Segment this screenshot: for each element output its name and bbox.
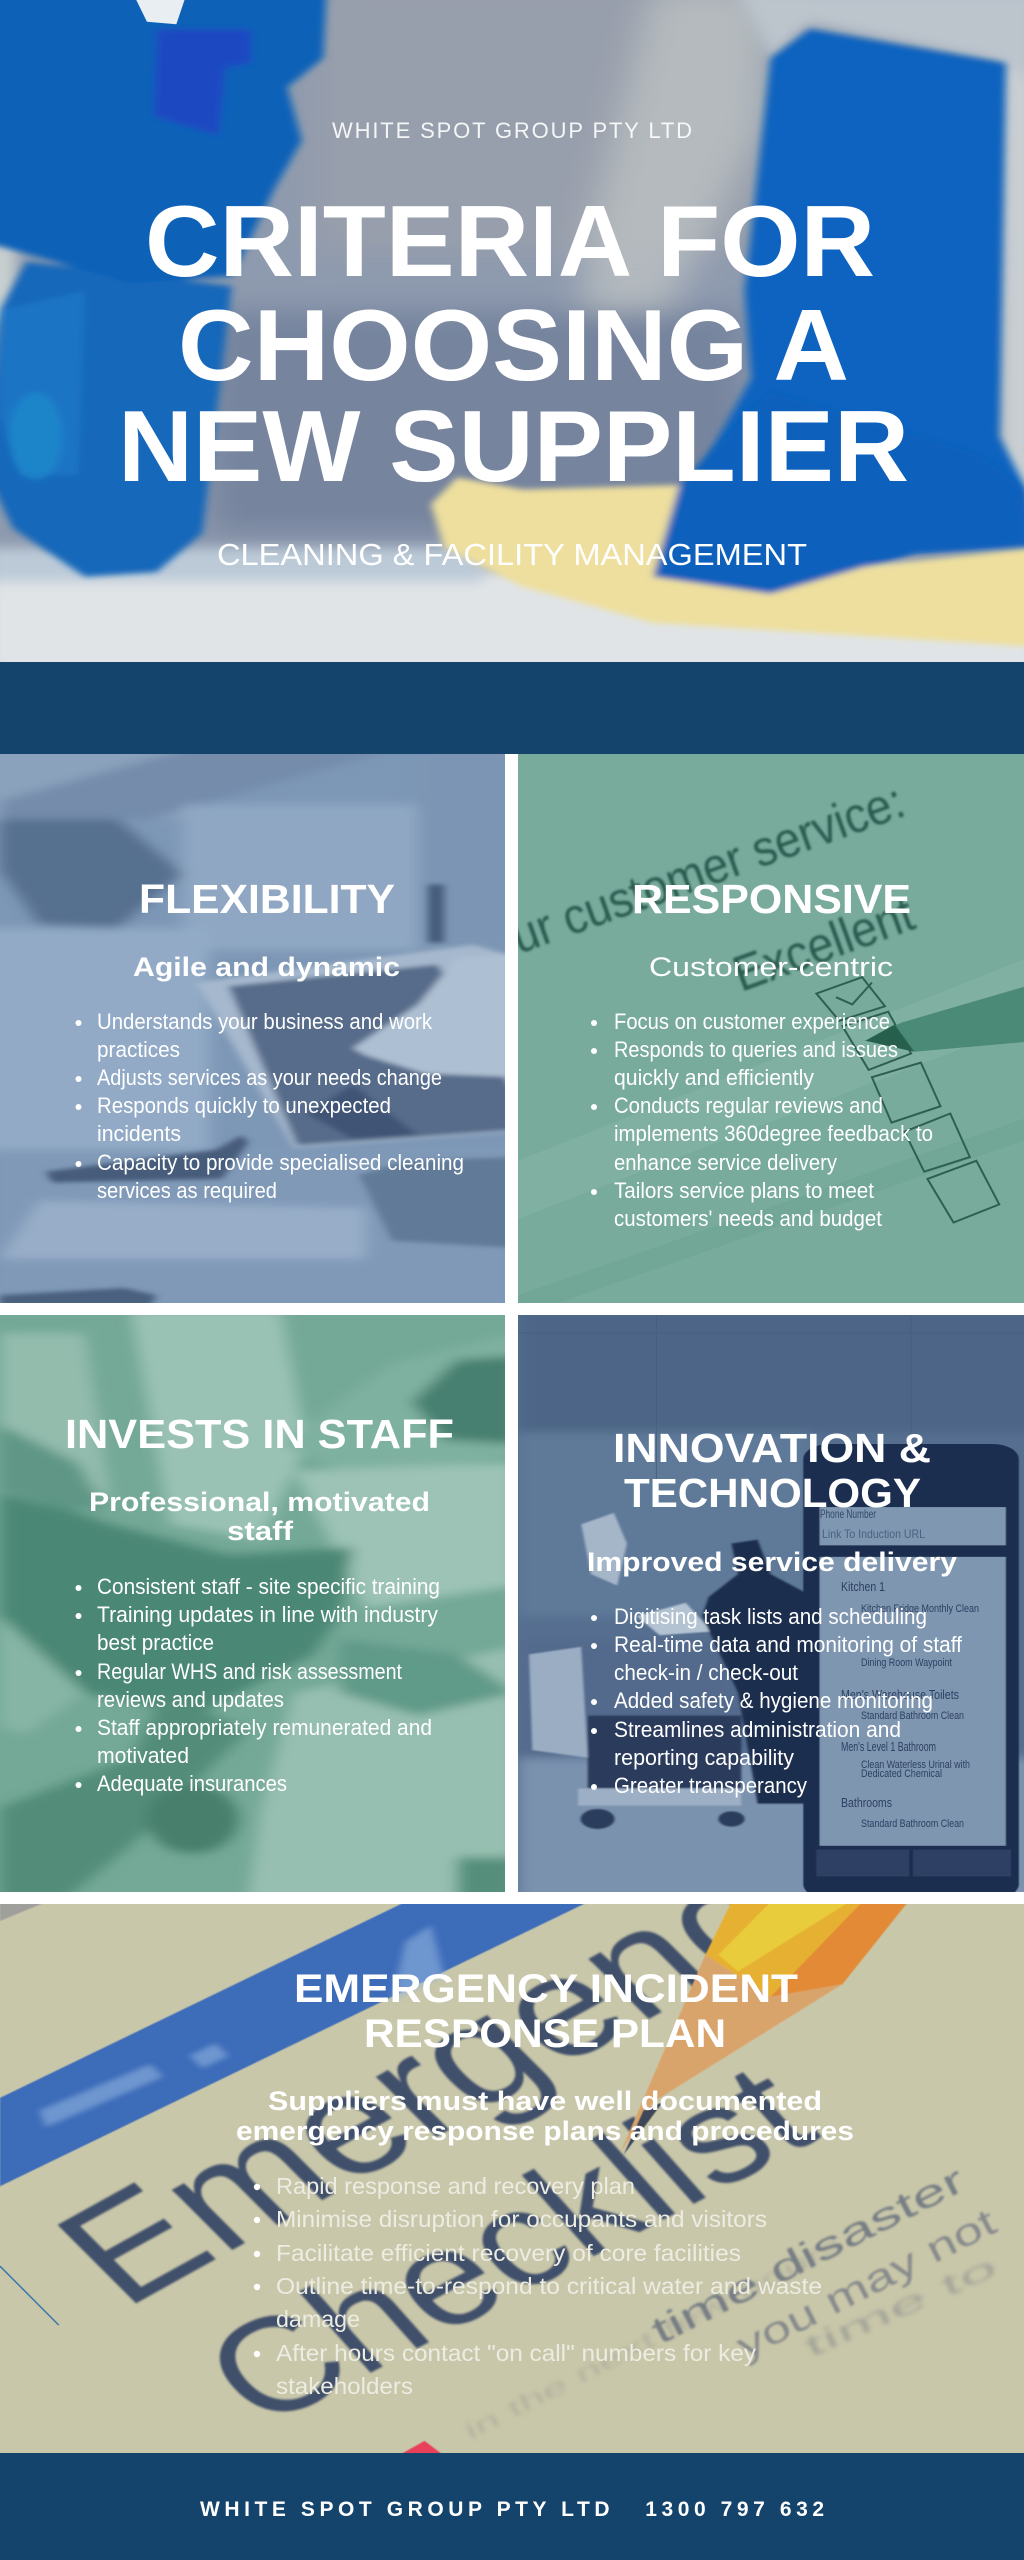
subtitle: CLEANING & FACILITY MANAGEMENT bbox=[217, 537, 807, 572]
bullet list: Understands your business and work bbox=[97, 1009, 433, 1034]
subheading: staff bbox=[227, 1516, 294, 1546]
footer bar bbox=[0, 2453, 1024, 2560]
bullet list: Rapid response and recovery plan bbox=[276, 2173, 635, 2199]
photo: cleaner and phone app: Standard Bathroom Clean bbox=[861, 1818, 964, 1830]
photo: cleaner and phone app: Kitchen Fridge Monthly Clean bbox=[861, 1603, 979, 1615]
heading: RESPONSE PLAN bbox=[364, 2012, 726, 2056]
bullet list bbox=[254, 2173, 822, 2399]
photo: cleaner and phone app: Kitchen 1 bbox=[841, 1579, 885, 1594]
panel: innovation and technology bbox=[518, 1315, 1024, 1892]
bullet list bbox=[76, 1574, 440, 1796]
photo: customer service checklist bbox=[518, 772, 1024, 1224]
bullet list: Greater transperancy bbox=[614, 1773, 807, 1798]
bullet list: Minimise disruption for occupants and visitors bbox=[276, 2206, 767, 2232]
bullet list: Outline time-to-respond to critical water and waste bbox=[276, 2273, 822, 2299]
panel: hero banner bbox=[0, 0, 1024, 662]
bullet list: Adjusts services as your needs change bbox=[97, 1065, 442, 1090]
bullet list: best practice bbox=[97, 1630, 214, 1655]
heading: FLEXIBILITY bbox=[139, 876, 395, 922]
photo: handshake and tablet bbox=[0, 754, 505, 1303]
bullet list: reporting capability bbox=[614, 1745, 794, 1770]
bullet list: reviews and updates bbox=[97, 1687, 284, 1712]
photo: emergency checklist document: time disaster bbox=[645, 2159, 972, 2353]
photo: cleaner and phone app: Dining Room Waypoint bbox=[861, 1657, 952, 1669]
heading: INVESTS IN STAFF bbox=[65, 1411, 454, 1457]
company name: WHITE SPOT GROUP PTY LTD bbox=[332, 118, 692, 143]
bullet list bbox=[591, 1009, 933, 1231]
bullet list: Focus on customer experience bbox=[614, 1009, 890, 1034]
panel text bbox=[587, 1425, 963, 1798]
bullet list: Added safety & hygiene monitoring bbox=[614, 1688, 933, 1713]
photo: cleaner and phone app: Clean Waterless Urinal with bbox=[861, 1759, 970, 1771]
main title: CRITERIA FOR bbox=[145, 186, 875, 298]
bullet list: incidents bbox=[97, 1121, 181, 1146]
bullet list: Capacity to provide specialised cleaning bbox=[97, 1150, 464, 1175]
subheading: Suppliers must have well documented bbox=[268, 2086, 822, 2116]
bullet list: motivated bbox=[97, 1743, 189, 1768]
subheading: Professional, motivated bbox=[89, 1487, 430, 1517]
panel: emergency incident response plan bbox=[0, 1904, 1024, 2453]
heading: RESPONSIVE bbox=[632, 876, 911, 922]
bullet list: implements 360degree feedback to bbox=[614, 1121, 933, 1146]
bullet list: Staff appropriately remunerated and bbox=[97, 1715, 432, 1740]
bullet list: stakeholders bbox=[276, 2373, 413, 2399]
photo: cleaner and phone app: Standard Bathroom Clean bbox=[861, 1710, 964, 1722]
bullet list: Real-time data and monitoring of staff bbox=[614, 1632, 963, 1657]
main title bbox=[118, 186, 909, 503]
bullet list: Streamlines administration and bbox=[614, 1717, 901, 1742]
heading bbox=[613, 1425, 931, 1516]
bullet list: Tailors service plans to meet bbox=[614, 1178, 874, 1203]
photo: cleaner and phone app: Men's Warehouse Toilets bbox=[841, 1687, 959, 1702]
navy band bbox=[0, 662, 1024, 754]
bullet list: Facilitate efficient recovery of core facilities bbox=[276, 2240, 741, 2266]
bullet list: Responds quickly to unexpected bbox=[97, 1093, 391, 1118]
hero text bbox=[118, 118, 909, 572]
heading: EMERGENCY INCIDENT bbox=[294, 1967, 798, 2011]
photo: cleaner and phone app: Dedicated Chemical bbox=[861, 1768, 942, 1780]
photo: cleaner and phone app: Phone Number bbox=[820, 1507, 876, 1521]
photo: emergency checklist document: in the next few hours bbox=[460, 2231, 847, 2445]
bullet list: check-in / check-out bbox=[614, 1660, 798, 1685]
bullet list: After hours contact "on call" numbers for key bbox=[276, 2340, 757, 2366]
photo: emergency checklist document: time to bbox=[799, 2250, 1002, 2364]
bullet list bbox=[76, 1009, 464, 1203]
subheading bbox=[89, 1487, 430, 1546]
main title: CHOOSING A bbox=[178, 290, 849, 402]
hero photo: gloved hands cleaning bbox=[0, 0, 1024, 662]
photo: emergency checklist document bbox=[0, 1904, 1004, 2453]
panel text bbox=[591, 876, 933, 1231]
bullet list: Training updates in line with industry bbox=[97, 1602, 438, 1627]
panel: responsive bbox=[518, 754, 1024, 1303]
bullet list: enhance service delivery bbox=[614, 1150, 837, 1175]
panel: flexibility bbox=[0, 754, 505, 1303]
photo: cleaner and phone app: Bathrooms bbox=[841, 1795, 892, 1810]
bullet list bbox=[591, 1604, 963, 1798]
heading: INNOVATION & bbox=[613, 1425, 931, 1471]
bullet list: Adequate insurances bbox=[97, 1771, 287, 1796]
footer contact text: WHITE SPOT GROUP PTY LTD 1300 797 632 bbox=[200, 2498, 824, 2521]
panel text bbox=[65, 1411, 454, 1796]
bullet list: practices bbox=[97, 1037, 180, 1062]
subheading: Customer-centric bbox=[649, 952, 893, 982]
subheading: Agile and dynamic bbox=[133, 952, 400, 982]
subheading bbox=[236, 2086, 854, 2146]
photo: cleaner and phone app: Link To Induction URL bbox=[822, 1527, 925, 1541]
bullet list: services as required bbox=[97, 1178, 277, 1203]
bullet list: customers' needs and budget bbox=[614, 1206, 882, 1231]
subheading: Improved service delivery bbox=[587, 1547, 957, 1577]
photo: stacked hands bbox=[0, 1315, 505, 1892]
bullet list: Regular WHS and risk assessment bbox=[97, 1659, 402, 1684]
bullet list: Digitising task lists and scheduling bbox=[614, 1604, 927, 1629]
bullet list: damage bbox=[276, 2306, 360, 2332]
photo: customer service checklist: Excellent bbox=[726, 885, 922, 1002]
bullet list: quickly and efficiently bbox=[614, 1065, 814, 1090]
photo: emergency checklist document: you may not bbox=[730, 2201, 1004, 2368]
subheading: emergency response plans and procedures bbox=[236, 2116, 854, 2146]
heading: TECHNOLOGY bbox=[624, 1470, 921, 1516]
bullet list: Conducts regular reviews and bbox=[614, 1093, 883, 1118]
panel text bbox=[236, 1967, 854, 2399]
main title: NEW SUPPLIER bbox=[118, 391, 909, 503]
bullet list: Consistent staff - site specific training bbox=[97, 1574, 440, 1599]
bullet list: Responds to queries and issues bbox=[614, 1037, 898, 1062]
photo: cleaner and phone app bbox=[518, 1315, 1024, 1892]
panel: invests in staff bbox=[0, 1315, 505, 1892]
photo: cleaner and phone app: Men's Level 1 Bathroom bbox=[841, 1739, 936, 1754]
photo: emergency checklist document: Checklist bbox=[172, 2036, 844, 2453]
panel text bbox=[76, 876, 464, 1203]
heading bbox=[294, 1967, 798, 2056]
